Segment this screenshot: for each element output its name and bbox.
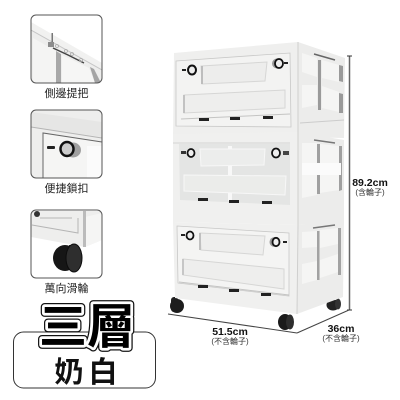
caster: rear right xyxy=(326,298,341,310)
side panel recesses xyxy=(302,228,338,284)
caster: rear left xyxy=(170,297,184,313)
caption: swivel caster: 萬向滑輪 xyxy=(44,281,88,295)
lock left xyxy=(182,66,196,74)
panel: side handle detail xyxy=(31,15,102,83)
storage cabinet product xyxy=(170,42,345,330)
side panel recesses xyxy=(302,143,339,198)
dimension: width label: 51.5cm xyxy=(212,326,248,338)
dimension: height line xyxy=(347,56,352,310)
dimension: width line xyxy=(168,314,297,333)
icon: lock knob xyxy=(47,142,81,158)
dimension: width label: (不含輪子) xyxy=(211,336,249,346)
colour name xyxy=(54,356,118,389)
icon: caster wheel xyxy=(53,244,82,272)
caster: front xyxy=(278,314,294,330)
dimension: height label: (含輪子) xyxy=(355,187,385,197)
heading: three tiers: 三層 xyxy=(39,301,135,354)
dimension: depth label: 36cm xyxy=(328,323,354,335)
panel: swivel caster detail xyxy=(31,210,102,278)
dimension: width label xyxy=(211,326,249,346)
panel: quick lock detail xyxy=(31,110,102,178)
dimension: depth line xyxy=(297,310,349,333)
heading: three tiers: 三層 xyxy=(39,301,135,354)
panel: colour label xyxy=(14,332,156,389)
lock right xyxy=(270,237,287,247)
side panel recesses xyxy=(302,53,339,112)
latches xyxy=(199,116,273,121)
icon: handle strap xyxy=(48,33,101,83)
latches xyxy=(198,198,272,204)
tier 3: bottom xyxy=(173,222,344,314)
caption: side handle: 側邊提把 xyxy=(44,86,88,100)
lock left xyxy=(181,232,194,240)
dimension: height label xyxy=(352,177,388,197)
dimension: depth label: (不含輪子) xyxy=(322,333,360,343)
colour name: 白 xyxy=(88,356,118,389)
tier 2: middle transparent door xyxy=(173,132,344,225)
colour name: 奶 xyxy=(54,356,84,389)
latches xyxy=(198,285,271,296)
lock right xyxy=(272,148,289,158)
dimension: height label: 89.2cm xyxy=(352,177,388,189)
side handle xyxy=(314,54,335,60)
lock left xyxy=(181,149,194,157)
heading: three tiers: 三層 xyxy=(39,301,135,354)
lock right xyxy=(272,58,288,68)
tier 1: top xyxy=(173,42,345,138)
dimension: depth label xyxy=(322,323,360,343)
caption: quick lock: 便捷鎖扣 xyxy=(44,181,88,195)
